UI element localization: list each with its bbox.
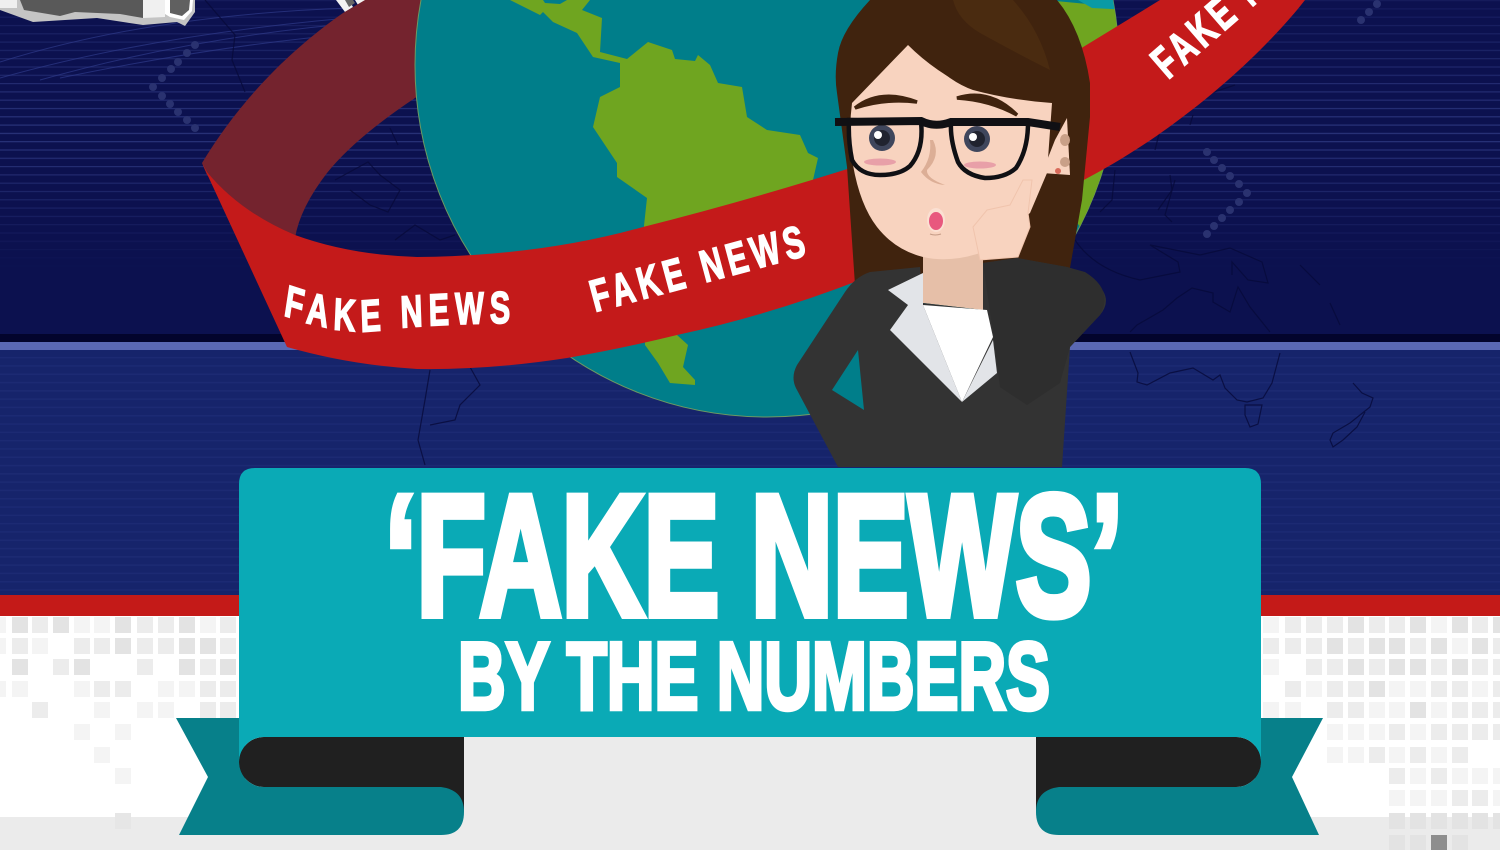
hand bbox=[973, 180, 1032, 260]
title banner bbox=[176, 460, 1323, 835]
face bbox=[850, 45, 1052, 259]
ear bbox=[1042, 118, 1070, 175]
mouth bbox=[927, 208, 945, 235]
ribbon front band bbox=[202, 164, 855, 370]
pixel square pattern bbox=[0, 617, 1500, 850]
continent: south america bbox=[510, 0, 818, 385]
lapels bbox=[888, 273, 1037, 402]
dotted arc left bbox=[149, 41, 199, 132]
eyes bbox=[869, 125, 990, 152]
dotted arc right bbox=[1203, 0, 1381, 238]
subheading: by the numbers: BY THE NUMBERS bbox=[458, 623, 1050, 730]
neck bbox=[923, 250, 983, 310]
ribbon right band bbox=[1075, 0, 1340, 182]
heading: fake news: ‘FAKE NEWS’ bbox=[385, 460, 1123, 652]
raised sleeve bbox=[983, 258, 1105, 405]
ribbon text: fake news centre: FAKE NEWS bbox=[585, 215, 815, 322]
world map outlines bbox=[205, 0, 1373, 465]
cheeks bbox=[864, 158, 996, 168]
torn newspaper clipping bbox=[0, 0, 366, 26]
left black fold bbox=[239, 737, 464, 812]
ribbon text: fake news left: FAKE NEWS bbox=[284, 284, 510, 333]
ribbon back: maroon loop bbox=[202, 0, 425, 238]
white shirt bbox=[923, 305, 993, 402]
glasses bbox=[835, 120, 1060, 178]
news presenter woman bbox=[794, 0, 1106, 467]
eyebrows bbox=[855, 95, 1017, 115]
right teal fold bbox=[1036, 787, 1280, 835]
arm gap bbox=[832, 350, 864, 410]
left ribbon tail bbox=[176, 718, 245, 835]
nose bbox=[921, 140, 945, 185]
right ribbon tail bbox=[1255, 718, 1323, 835]
blazer bbox=[794, 258, 1106, 467]
right black fold bbox=[1036, 737, 1261, 812]
banner panel bbox=[239, 468, 1261, 737]
globe bbox=[415, 0, 1130, 417]
left teal fold bbox=[220, 787, 464, 835]
hair bbox=[836, 0, 1090, 285]
continent: africa bbox=[1058, 1, 1117, 226]
